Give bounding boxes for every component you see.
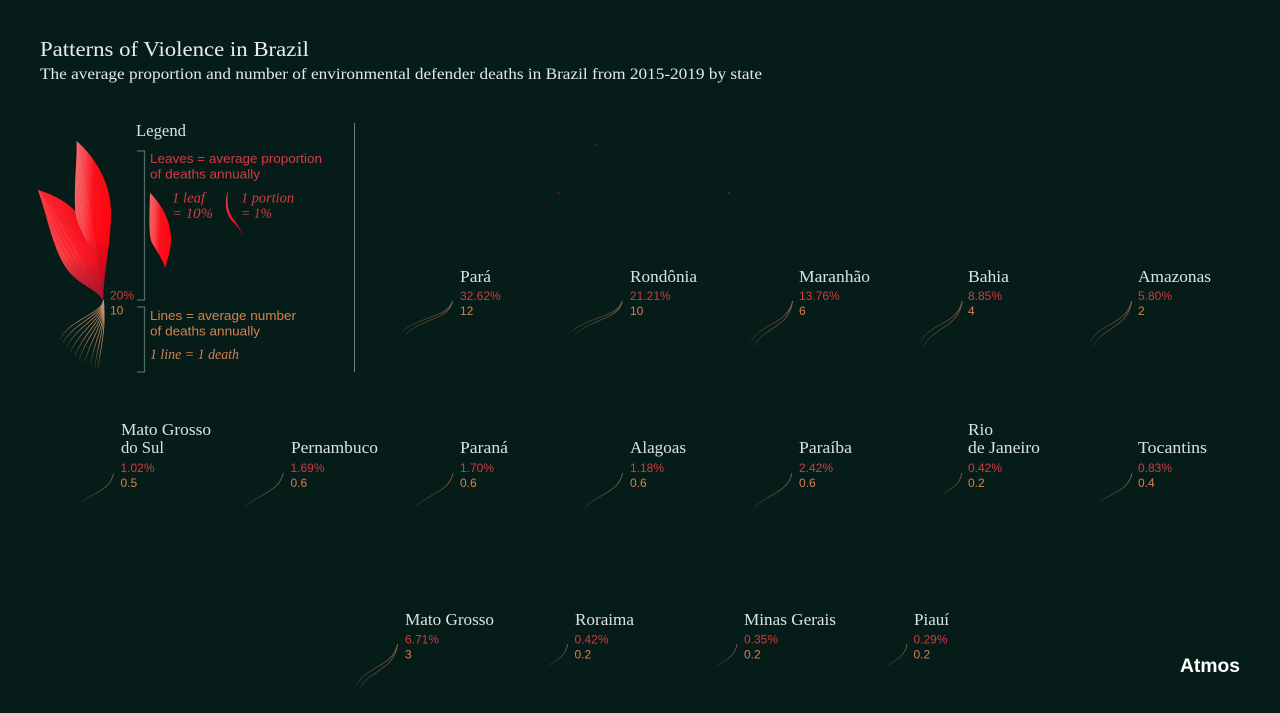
one line caption: 1 line = 1 death <box>150 347 239 363</box>
state: Bahia: 8.85% <box>968 289 1002 303</box>
state: Bahia: Bahia <box>968 267 1010 286</box>
state: Pará: 12 <box>460 304 474 318</box>
state: Paraíba: 0.6 <box>799 476 816 490</box>
state: Paraíba <box>755 438 853 507</box>
state: Mato Grosso do Sul: do Sul <box>121 438 164 457</box>
state: Pernambuco: 0.6 <box>290 476 308 490</box>
state: Mato Grosso: Mato Grosso <box>405 610 494 629</box>
state: Bahia: 4 <box>968 304 975 318</box>
state: Piauí: Piauí <box>914 610 949 629</box>
legend example plant: leaves <box>38 141 111 300</box>
state: Mato Grosso do Sul <box>82 420 211 502</box>
state: Piauí: 0.2 <box>914 648 931 662</box>
state: Alagoas: 1.18% <box>630 461 664 475</box>
state: Amazonas: 2 <box>1138 304 1145 318</box>
subtitle: The average proportion and number of environmental defender deaths in Brazil from 2015-2019 by state <box>40 66 762 83</box>
state: Mato Grosso: 6.71% <box>405 632 439 646</box>
state: Tocantins: Tocantins <box>1138 438 1207 457</box>
state: Minas Gerais: 0.2 <box>744 648 761 662</box>
state: Pernambuco <box>245 438 378 507</box>
state: Rondônia: Rondônia <box>630 267 698 286</box>
one portion caption <box>241 190 294 222</box>
legend example values: 10 <box>110 304 124 318</box>
brand logo: Atmos: Atmos <box>1180 656 1240 677</box>
state: Bahia <box>921 267 1010 346</box>
state: Amazonas: Amazonas <box>1138 267 1211 286</box>
state: Pernambuco: Pernambuco <box>291 438 378 457</box>
state: Mato Grosso: 3 <box>405 648 412 662</box>
state: Amazonas <box>1090 267 1211 346</box>
state: Maranhão: 6 <box>799 304 806 318</box>
one portion caption: 1 portion <box>241 190 294 206</box>
leaves explanation: Leaves = average proportion <box>150 151 322 166</box>
state: Rondônia <box>572 267 698 335</box>
one leaf caption: = 10% <box>172 206 213 222</box>
icon: single leaf <box>149 193 171 268</box>
state: Paraíba: Paraíba <box>799 438 853 457</box>
state: Maranhão: 13.76% <box>799 289 840 303</box>
one leaf caption: 1 leaf <box>172 190 207 206</box>
state: Roraima: 0.2 <box>574 648 592 662</box>
stray marks <box>558 144 730 194</box>
state: Rio de Janeiro: 0.2 <box>968 476 985 490</box>
state: Rio de Janeiro: 0.42% <box>968 461 1002 475</box>
legend example values: 20% <box>110 288 134 302</box>
state: Rio de Janeiro: de Janeiro <box>968 438 1040 457</box>
lines explanation: Lines = average number <box>150 308 297 323</box>
state: Maranhão <box>751 267 870 346</box>
state: Tocantins: 0.83% <box>1138 461 1172 475</box>
state: Minas Gerais <box>718 610 836 665</box>
state: Piauí: 0.29% <box>914 632 948 646</box>
leaves explanation: of deaths annually <box>150 166 260 182</box>
state: Piauí <box>888 610 949 665</box>
state: Roraima: Roraima <box>575 610 635 629</box>
state: Pará: 32.62% <box>460 289 501 303</box>
state: Alagoas <box>585 438 686 507</box>
state: Alagoas: Alagoas <box>630 438 686 457</box>
lines explanation <box>150 308 297 338</box>
icon: single portion <box>226 193 243 236</box>
state: Rondônia: 21.21% <box>630 289 671 303</box>
lines explanation: of deaths annually <box>150 324 260 338</box>
title: Patterns of Violence in Brazil <box>40 37 309 61</box>
state: Paraná: 0.6 <box>460 476 477 490</box>
bracket: leaves <box>137 151 144 300</box>
state: Paraná <box>415 438 509 507</box>
state: Maranhão: Maranhão <box>799 267 870 286</box>
legend panel <box>38 121 322 372</box>
state: Pará: Pará <box>460 267 492 286</box>
state: Paraná: 1.70% <box>460 461 494 475</box>
legend divider <box>354 123 355 372</box>
legend heading: Legend <box>136 121 187 140</box>
one leaf caption <box>172 190 213 222</box>
state: Minas Gerais: Minas Gerais <box>744 610 836 629</box>
state: Mato Grosso do Sul: Mato Grosso <box>121 420 211 439</box>
state: Mato Grosso do Sul: 0.5 <box>120 476 138 490</box>
legend example plant: root lines <box>59 300 104 369</box>
state: Paraná: Paraná <box>460 438 509 457</box>
state: Pernambuco: 1.69% <box>290 461 325 475</box>
state: Rio de Janeiro: Rio <box>968 420 993 439</box>
bracket: lines <box>137 307 144 372</box>
state: Roraima: 0.42% <box>574 632 609 646</box>
state: Mato Grosso do Sul: 1.02% <box>120 461 155 475</box>
legend example values <box>110 288 134 318</box>
state: Paraíba: 2.42% <box>799 461 833 475</box>
state: Rio de Janeiro <box>944 420 1040 493</box>
state: Roraima <box>549 610 635 665</box>
one portion caption: = 1% <box>241 206 272 222</box>
state: Mato Grosso <box>356 610 494 689</box>
state: Tocantins: 0.4 <box>1138 476 1155 490</box>
leaves explanation <box>150 151 322 182</box>
state: Minas Gerais: 0.35% <box>744 632 778 646</box>
state: Pará <box>403 267 501 335</box>
state: Tocantins <box>1100 438 1207 502</box>
state: Rondônia: 10 <box>630 304 644 318</box>
state: Amazonas: 5.80% <box>1138 289 1172 303</box>
state: Alagoas: 0.6 <box>630 476 647 490</box>
